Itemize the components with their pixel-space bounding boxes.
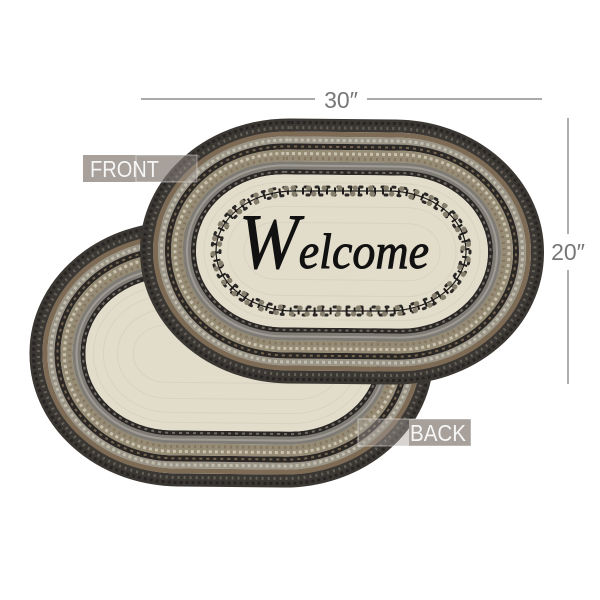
label backing: front: [83, 155, 197, 182]
back rug: [32, 224, 431, 485]
label: front: [83, 155, 197, 182]
rug braided border and centre: [143, 121, 541, 382]
label: front: FRONT: [90, 156, 159, 182]
label: back: BACK: [410, 420, 467, 446]
front rug: [143, 121, 541, 382]
welcome script text: Welcome: [239, 198, 429, 285]
dimension: height 20 inches: 20″: [551, 239, 585, 265]
label: back: [358, 419, 471, 446]
dimension: width 30 inches: 30″: [324, 87, 358, 113]
floral wreath: [212, 187, 470, 315]
